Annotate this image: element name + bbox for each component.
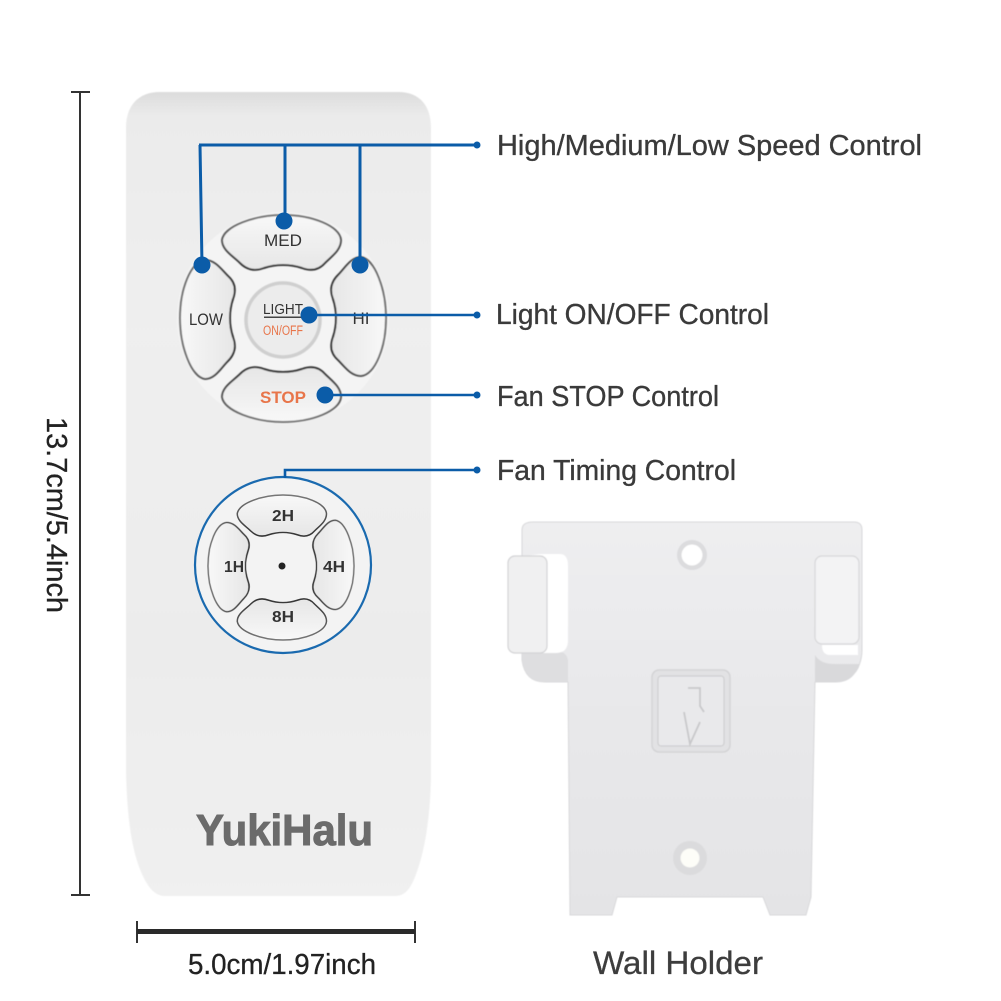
label: fan timing: Fan Timing Control [497,455,736,487]
holder plate [522,522,862,915]
label: light control: Light ON/OFF Control [496,299,769,331]
brand logo: YukiHalu [196,806,373,855]
left slot [525,554,568,653]
button: LOW: LOW [189,310,223,329]
button: 1H: 1H [224,559,244,576]
leader line: light control [300,306,480,324]
button: LOW [180,260,235,379]
left clip [508,556,547,653]
leader lines: speed control [194,142,480,274]
remote control body [126,92,431,896]
button: LIGHT ON/OFF: ON/OFF [263,323,303,338]
right clip [815,556,859,644]
height label: 13.7cm/5.4inch [40,417,72,613]
button: 8H [237,599,326,640]
button: MED: MED [264,232,302,250]
button: LIGHT ON/OFF [246,283,320,357]
center dot [278,562,286,570]
main button cluster [177,212,389,424]
button: LIGHT ON/OFF: LIGHT [263,301,303,318]
bottom screw hole [673,841,707,875]
button: STOP [222,367,341,422]
label: fan stop: Fan STOP Control [497,381,719,413]
button: 4H: 4H [323,559,345,576]
leader line: timing control [285,466,480,478]
lower left lip shading [522,652,568,682]
height dimension [40,92,90,895]
button: STOP: STOP [260,389,306,407]
top screw hole [677,540,707,570]
button: 2H [237,495,326,536]
leader line: stop control [316,386,480,404]
button: 8H: 8H [272,609,294,626]
label: wall holder: Wall Holder [593,945,763,981]
wall holder [508,522,862,915]
timer button cluster [195,477,371,653]
button: HI [331,257,386,376]
arrow emboss [652,670,730,752]
button: 1H [208,522,249,612]
right slot [822,645,858,655]
width dimension [137,921,415,981]
width label: 5.0cm/1.97inch [188,949,376,981]
label: speed control: High/Medium/Low Speed Control [497,130,922,162]
button: HI: HI [352,309,370,328]
button: 2H: 2H [272,508,294,525]
lower right lip shading [815,655,860,682]
button: 4H [313,520,354,610]
button: MED [222,215,341,270]
